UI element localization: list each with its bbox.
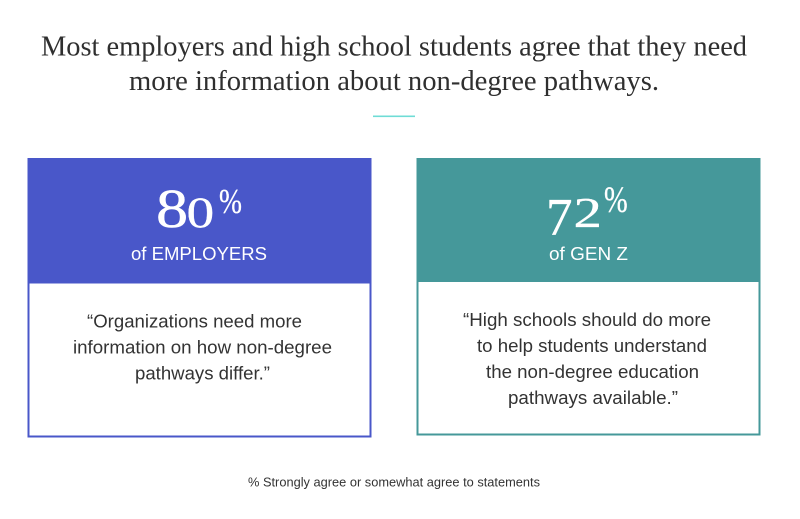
title [41, 32, 747, 97]
divider accent [373, 116, 415, 117]
quote: gen z [463, 310, 711, 408]
panel: employers [28, 158, 371, 436]
label: of employers: of EMPLOYERS [131, 244, 267, 264]
stat digit 7: 7 [546, 189, 572, 247]
quote: employers: pathways differ.” [135, 364, 270, 384]
panel header: gen z [417, 158, 760, 282]
panel: gen z [417, 158, 760, 434]
panel outline: gen z [418, 159, 760, 434]
footnote: % Strongly agree or somewhat agree to statements [248, 476, 540, 490]
quote: gen z: the non-degree education [486, 362, 699, 382]
stat digit 8: 8 [156, 178, 188, 239]
quote: gen z: pathways available.” [508, 388, 678, 408]
quote: employers: “Organizations need more [87, 312, 302, 332]
quote: gen z: to help students understand [477, 336, 707, 356]
quote: gen z: “High schools should do more [463, 310, 711, 330]
stat digit 0: 0 [186, 189, 214, 237]
quote: employers: information on how non-degree [73, 338, 332, 358]
panel header: employers [28, 158, 371, 284]
stat percent sign: % [219, 182, 242, 221]
title: Most employers and high school students agree that they need [41, 32, 747, 62]
quote: employers [73, 312, 332, 384]
panel outline: employers [28, 159, 370, 436]
stat percent sign: % [604, 181, 628, 221]
title: more information about non-degree pathways. [129, 66, 659, 97]
label: of gen z: of GEN Z [549, 244, 628, 264]
stat digit 2: 2 [574, 190, 602, 236]
